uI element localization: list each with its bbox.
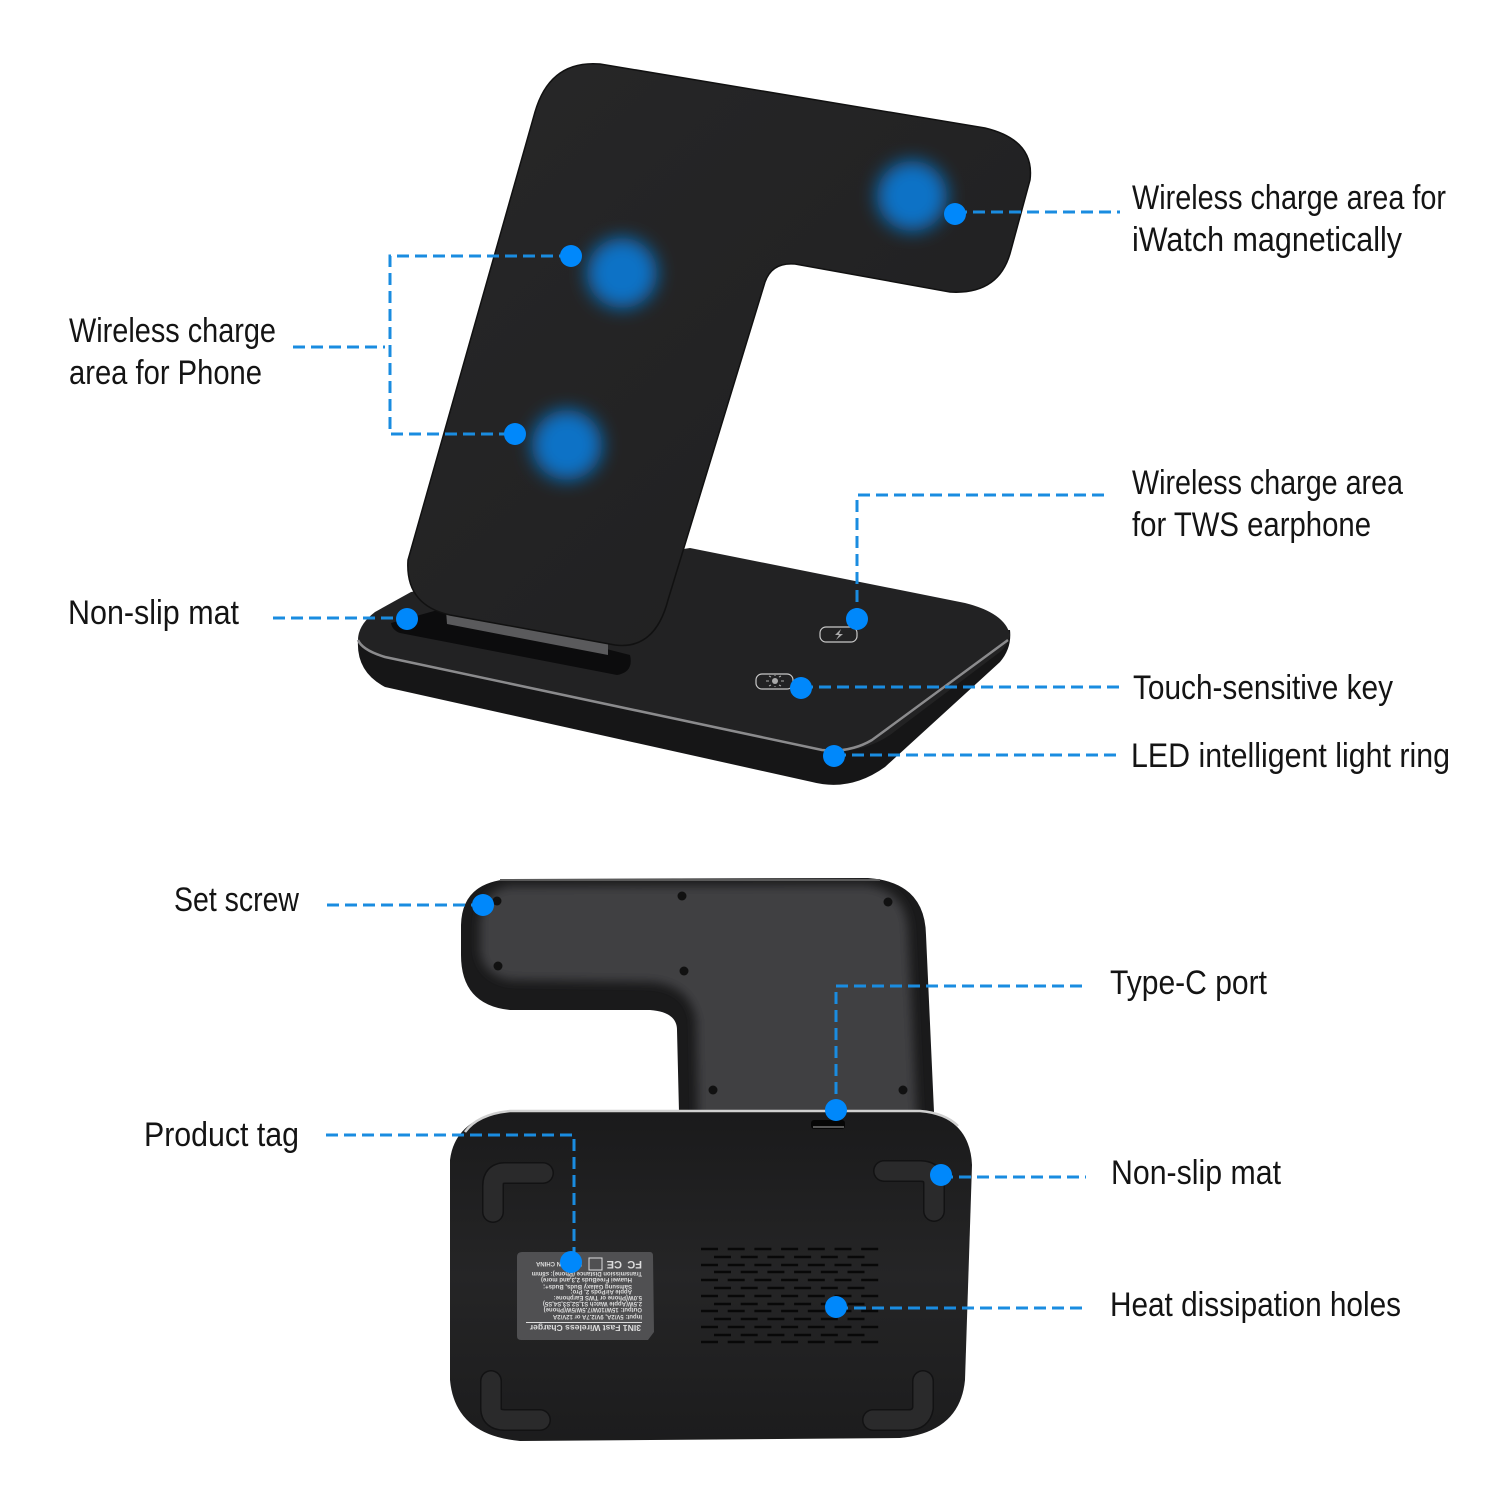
- product tag: Samsung Galaxy Buds, Buds+;: [543, 1283, 632, 1289]
- label: phone charge area: area for Phone: [69, 354, 262, 392]
- label: LED ring: LED intelligent light ring: [1131, 737, 1450, 775]
- leader: LED light ring: [823, 745, 1122, 767]
- product tag: Output: 15W/10W/7.5W/5W(Phone): [544, 1306, 642, 1312]
- leader: touch-sensitive key: [790, 677, 1120, 699]
- glow: iWatch charge area: [877, 161, 947, 231]
- product tag: Huawei FreeBuds 2,3,and more): [541, 1276, 632, 1282]
- label: set screw: Set screw: [174, 881, 299, 919]
- label: non-slip mat top: Non-slip mat: [68, 594, 239, 632]
- label: phone charge area: [69, 312, 276, 392]
- product tag: Input: 5V/2A, 9V/2.7A or 12V/2A: [552, 1313, 642, 1319]
- leader: product tag: [326, 1135, 582, 1273]
- label: TWS earphone area: Wireless charge area: [1132, 464, 1403, 502]
- label: Type-C port: Type-C port: [1110, 964, 1267, 1002]
- product tag: FC: [627, 1258, 642, 1270]
- glow: phone charge area upper: [587, 238, 657, 308]
- product tag: Apple AirPods 2, Pro;: [571, 1288, 632, 1294]
- charger upright stand: [408, 64, 1030, 645]
- product: charger front view: [358, 64, 1030, 785]
- label: iWatch charge area: [1132, 179, 1446, 259]
- leader: non-slip mat top view: [273, 608, 418, 630]
- leader: non-slip mat underside: [930, 1164, 1086, 1186]
- heat dissipation holes: [701, 1249, 880, 1342]
- product: charger back and underside view: [450, 878, 972, 1441]
- leader: Type-C port: [825, 986, 1082, 1121]
- back of stand: [461, 878, 934, 1120]
- label: iWatch charge area: iWatch magnetically: [1132, 221, 1402, 259]
- product tag: 2.5W(Apple Watch S1,S2,S3,S4,S5): [543, 1300, 642, 1306]
- gray strip under stand: [446, 610, 608, 655]
- non-slip mats: [491, 1171, 934, 1420]
- product tag: 3IN1 Fast Wireless Charger: [529, 1323, 641, 1333]
- screws: [492, 892, 908, 1094]
- product tag: [517, 1252, 654, 1340]
- label: phone charge area: Wireless charge: [69, 312, 276, 350]
- Type-C port: [811, 1120, 845, 1129]
- glow: phone charge area lower: [532, 410, 602, 480]
- key: touch light symbol: [756, 674, 793, 689]
- label: TWS earphone area: [1132, 464, 1403, 544]
- label: iWatch charge area: Wireless charge area for: [1132, 179, 1446, 217]
- product tag: MADE IN CHINA: [535, 1260, 582, 1266]
- leader: phone charge area: [293, 245, 582, 445]
- label: heat dissipation holes: Heat dissipation holes: [1110, 1286, 1401, 1324]
- label: product tag: Product tag: [144, 1116, 299, 1154]
- label: touch-sensitive key: Touch-sensitive key: [1133, 669, 1393, 707]
- label: non-slip mat underside: Non-slip mat: [1111, 1154, 1281, 1192]
- underside of base: [450, 1110, 972, 1441]
- product tag: Transmission Distance (Phone): ≤8mm: [532, 1270, 642, 1276]
- leader: heat dissipation holes: [825, 1296, 1087, 1318]
- charger base: [358, 548, 1010, 785]
- label: TWS earphone area: for TWS earphone: [1132, 506, 1371, 544]
- leader: iWatch charge area: [944, 203, 1120, 225]
- leader: TWS earphone area: [846, 495, 1104, 630]
- product tag: CE: [607, 1258, 622, 1270]
- product tag: 5.0W(Phone or TWS Earphone:: [554, 1294, 642, 1300]
- leader: set screw: [327, 894, 494, 916]
- non-slip mat slot: [391, 608, 631, 675]
- key: wireless charge symbol: [820, 627, 857, 642]
